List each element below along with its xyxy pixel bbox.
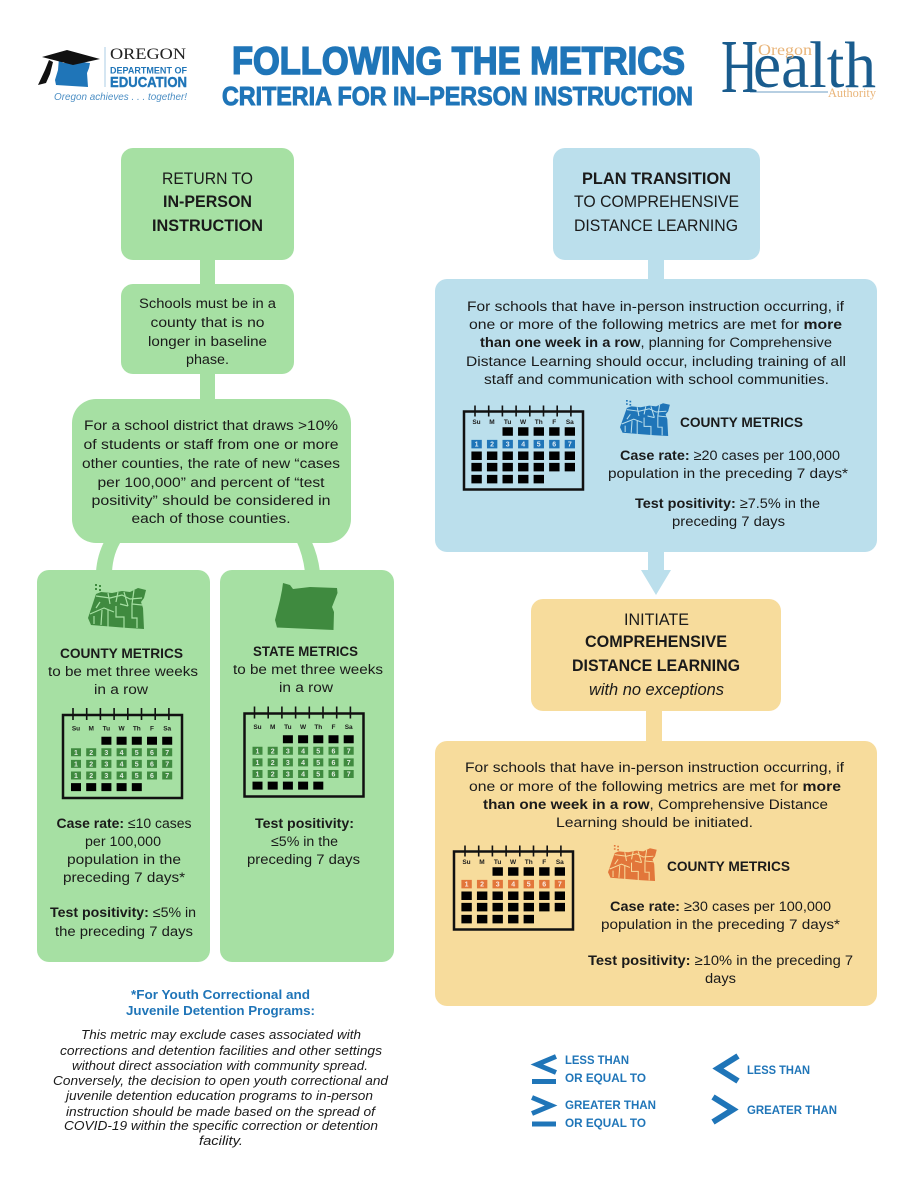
footnote: youth correctional programs: This metric may exclude cases associated with [81, 1028, 361, 1042]
panel: plan transition criteria: staff and communication with school communities. [484, 372, 829, 388]
icon: calendar, one blue week: Tu [504, 419, 511, 426]
logo: Oregon Department of Education: DEPARTMENT OF [110, 66, 187, 76]
panel: distance learning criteria: one or more of the following metrics are met for more [469, 779, 841, 795]
footnote: youth correctional programs: COVID-19 within the specific correction or detention [64, 1119, 378, 1133]
legend: comparison symbols: OR EQUAL TO [565, 1073, 646, 1085]
panel: plan transition heading: PLAN TRANSITION [582, 170, 731, 188]
panel: county metrics, three weeks: to be met three weeks [48, 664, 198, 680]
panel: distance learning criteria [435, 741, 877, 1006]
footnote: youth correctional programs: Conversely, the decision to open youth correctional and [53, 1074, 389, 1088]
icon: Oregon county map, orange [608, 845, 657, 881]
legend: comparison symbols: LESS THAN [747, 1065, 810, 1077]
legend: comparison symbols: OR EQUAL TO [565, 1118, 646, 1130]
panel: plan transition criteria: one or more of the following metrics are met for more [469, 317, 842, 333]
icon: calendar, one orange week: W [510, 859, 517, 866]
title: FOLLOWING THE METRICS [232, 40, 685, 83]
panel: baseline phase requirement: county that is no [150, 315, 265, 331]
footnote: youth correctional programs: juvenile detention education programs to in-person [64, 1089, 373, 1103]
legend: comparison symbols: GREATER THAN [747, 1105, 837, 1117]
legend: comparison symbols: GREATER THAN [565, 1100, 656, 1112]
panel: distance learning criteria: population in the preceding 7 days* [601, 917, 841, 933]
panel: plan transition criteria: Case rate: ≥20 cases per 100,000 [620, 448, 840, 464]
panel: distance learning criteria: Test positivity: ≥10% in the preceding 7 [588, 953, 853, 969]
icon: calendar, one orange week [454, 846, 573, 930]
icon: calendar, three green weeks: Th [133, 726, 141, 732]
logo: Oregon Health Authority: Oregon [758, 42, 812, 59]
icon: calendar, three green weeks: M [270, 724, 275, 731]
icon: calendar, three green weeks [244, 706, 364, 796]
panel: distance learning criteria: Case rate: ≥30 cases per 100,000 [610, 899, 831, 915]
connectors: green flow [96, 255, 320, 572]
panel: plan transition heading: TO COMPREHENSIVE [574, 193, 739, 211]
footnote: youth correctional programs: corrections and detention facilities and other settings [60, 1044, 382, 1058]
icon: calendar, three green weeks: M [88, 726, 94, 732]
icon: calendar, three green weeks: Su [253, 724, 262, 731]
panel: return to in-person instruction: IN-PERSON [163, 193, 252, 211]
panel: state metrics, three weeks: preceding 7 days [247, 852, 360, 868]
panel: baseline phase requirement: phase. [186, 352, 229, 368]
icon: calendar, one orange week: 1234567 [465, 882, 562, 889]
panel: school district rule: per 100,000” and percent of “test [98, 475, 325, 491]
panel: plan transition criteria: Distance Learning should occur, including training of all [466, 354, 846, 370]
panel: county metrics, three weeks: per 100,000 [85, 834, 161, 850]
icon: calendar, three green weeks: W [119, 726, 126, 732]
icon: calendar, one blue week: Sa [566, 419, 574, 426]
connector: yellow flow [646, 706, 662, 746]
panel: county metrics, three weeks: in a row [94, 682, 149, 698]
panel: baseline phase requirement [121, 284, 294, 374]
icon: Oregon county map, blue [620, 400, 670, 436]
panel: state metrics, three weeks [220, 570, 394, 962]
panel: plan transition heading: DISTANCE LEARNING [574, 217, 738, 235]
icon: calendar, three green weeks: 1234567 [74, 750, 169, 757]
icon: calendar, one orange week: Th [525, 859, 533, 866]
panel: initiate comprehensive distance learning heading: COMPREHENSIVE [585, 633, 727, 651]
panel: plan transition criteria: than one week in a row , planning for Comprehensive [480, 335, 832, 351]
icon: calendar, one blue week: Su [472, 419, 481, 426]
icon: calendar, one orange week: M [479, 859, 485, 866]
icon: calendar, three green weeks: Sa [163, 726, 172, 732]
logo: Oregon Health Authority [721, 25, 877, 109]
logo: Oregon Health Authority: H [721, 25, 758, 109]
panel: initiate comprehensive distance learning heading: DISTANCE LEARNING [572, 657, 740, 675]
footnote: youth correctional programs: without direct association with community spread. [72, 1059, 368, 1073]
panel: return to in-person instruction: INSTRUCTION [152, 217, 263, 235]
logo: Oregon Health Authority: Authority [828, 86, 877, 100]
panel: county metrics, three weeks: COUNTY METRICS [60, 646, 183, 662]
footnote: youth correctional programs: facility. [199, 1134, 243, 1148]
connector and arrow: blue flow [641, 255, 671, 595]
icon: calendar, three green weeks: 1234567 [256, 748, 351, 755]
panel: state metrics, three weeks: ≤5% in the [271, 834, 338, 850]
icon: calendar, one blue week: 1234567 [475, 442, 572, 449]
icon: calendar, three green weeks: Th [314, 724, 322, 731]
icon: calendar, three green weeks: F [150, 726, 154, 732]
panel: county metrics, three weeks: Test positivity: ≤5% in [50, 905, 196, 921]
icon: calendar, three green weeks: Tu [284, 724, 292, 731]
icon: calendar, three green weeks: 1234567 [74, 773, 169, 780]
icon: calendar, one blue week: W [520, 419, 527, 426]
legend: comparison symbols: LESS THAN [565, 1055, 629, 1067]
panel: distance learning criteria: days [705, 971, 736, 987]
panel: school district rule: each of those counties. [132, 511, 290, 527]
icon: calendar, one blue week: F [552, 419, 556, 426]
icon: calendar, one blue week: Th [535, 419, 543, 426]
logo: Oregon Health Authority: ealth [753, 29, 876, 102]
footnote: youth correctional programs: instruction should be made based on the spread of [66, 1105, 377, 1119]
panel: state metrics, three weeks: STATE METRICS [253, 644, 358, 660]
icon: Oregon state map [275, 583, 338, 630]
panel: initiate comprehensive distance learning heading: with no exceptions [589, 681, 724, 699]
panel: county metrics, three weeks: the preceding 7 days [55, 924, 193, 940]
panel: state metrics, three weeks: to be met three weeks [233, 662, 383, 678]
panel: state metrics, three weeks: Test positivity: [255, 816, 354, 832]
panel: plan transition heading [553, 148, 760, 260]
panel: initiate comprehensive distance learning heading [531, 599, 781, 711]
panel: plan transition criteria: Test positivity: ≥7.5% in the [635, 496, 820, 512]
icon: calendar, one orange week: Sa [556, 859, 564, 866]
panel: baseline phase requirement: longer in baseline [148, 334, 267, 350]
panel: county metrics, three weeks: population in the [67, 852, 181, 868]
icon: calendar, one orange week: F [542, 859, 546, 866]
panel: school district rule: For a school district that draws >10% [84, 418, 338, 434]
icon: greater than or equal to [532, 1098, 556, 1124]
footnote: youth correctional programs: Juvenile Detention Programs: [126, 1004, 315, 1018]
icon: less than [718, 1056, 738, 1081]
logo: Oregon Department of Education: Oregon achieves . . . together! [54, 91, 187, 103]
panel: initiate comprehensive distance learning heading: INITIATE [624, 611, 689, 629]
panel: distance learning criteria: Learning should be initiated. [556, 815, 753, 831]
icon: less than or equal to [532, 1056, 556, 1082]
icon: calendar, three green weeks: F [332, 724, 336, 731]
icon: calendar, three green weeks: Sa [345, 724, 353, 731]
icon: calendar, one orange week: Su [462, 859, 471, 866]
logo: Oregon Department of Education: OREGON [110, 46, 186, 63]
panel: distance learning criteria: For schools that have in-person instruction occurring, if [465, 760, 844, 776]
panel: school district rule: of students or staff from one or more [84, 437, 339, 453]
panel: state metrics, three weeks: in a row [279, 680, 334, 696]
panel: distance learning criteria: than one week in a row , Comprehensive Distance [483, 797, 828, 813]
panel: county metrics, three weeks: Case rate: ≤10 cases [56, 816, 192, 832]
legend: comparison symbols [532, 1055, 837, 1130]
icon: calendar, one blue week: M [489, 419, 495, 426]
panel: plan transition criteria [435, 279, 877, 552]
panel: school district rule: other counties, the rate of new “cases [82, 456, 340, 472]
panel: return to in-person instruction [121, 148, 294, 260]
title: CRITERIA FOR IN–PERSON INSTRUCTION [222, 81, 693, 111]
icon: calendar, three green weeks [63, 708, 182, 798]
panel: distance learning criteria: COUNTY METRICS [667, 859, 790, 875]
footnote: youth correctional programs [53, 988, 389, 1148]
panel: plan transition criteria: For schools that have in-person instruction occurring, if [467, 299, 844, 315]
panel: county metrics, three weeks: preceding 7 days* [63, 870, 186, 886]
footnote: youth correctional programs: *For Youth Correctional and [131, 988, 310, 1002]
panel: plan transition criteria: COUNTY METRICS [680, 415, 803, 431]
icon: calendar, one orange week: Tu [494, 859, 501, 866]
title [222, 40, 693, 111]
panel: return to in-person instruction: RETURN TO [162, 170, 253, 188]
icon: calendar, three green weeks: W [300, 724, 307, 731]
panel: school district rule: positivity” should be considered in [92, 493, 330, 509]
panel: county metrics, three weeks [37, 570, 210, 962]
icon: calendar, three green weeks: Tu [103, 726, 110, 732]
panel: plan transition criteria: population in the preceding 7 days* [608, 466, 849, 482]
logo: Oregon Department of Education [38, 46, 187, 103]
icon: calendar, one blue week [464, 406, 583, 490]
icon: calendar, three green weeks: 1234567 [256, 760, 351, 767]
panel: school district rule [72, 399, 351, 543]
panel: plan transition criteria: preceding 7 days [672, 514, 785, 530]
icon: calendar, three green weeks: Su [72, 726, 80, 732]
icon: calendar, three green weeks: 1234567 [256, 772, 351, 778]
icon: greater than [713, 1097, 733, 1122]
icon: Oregon county map, green [88, 584, 146, 629]
panel: baseline phase requirement: Schools must be in a [139, 296, 276, 312]
logo: Oregon Department of Education: EDUCATION [110, 74, 187, 91]
icon: calendar, three green weeks: 1234567 [74, 761, 169, 768]
